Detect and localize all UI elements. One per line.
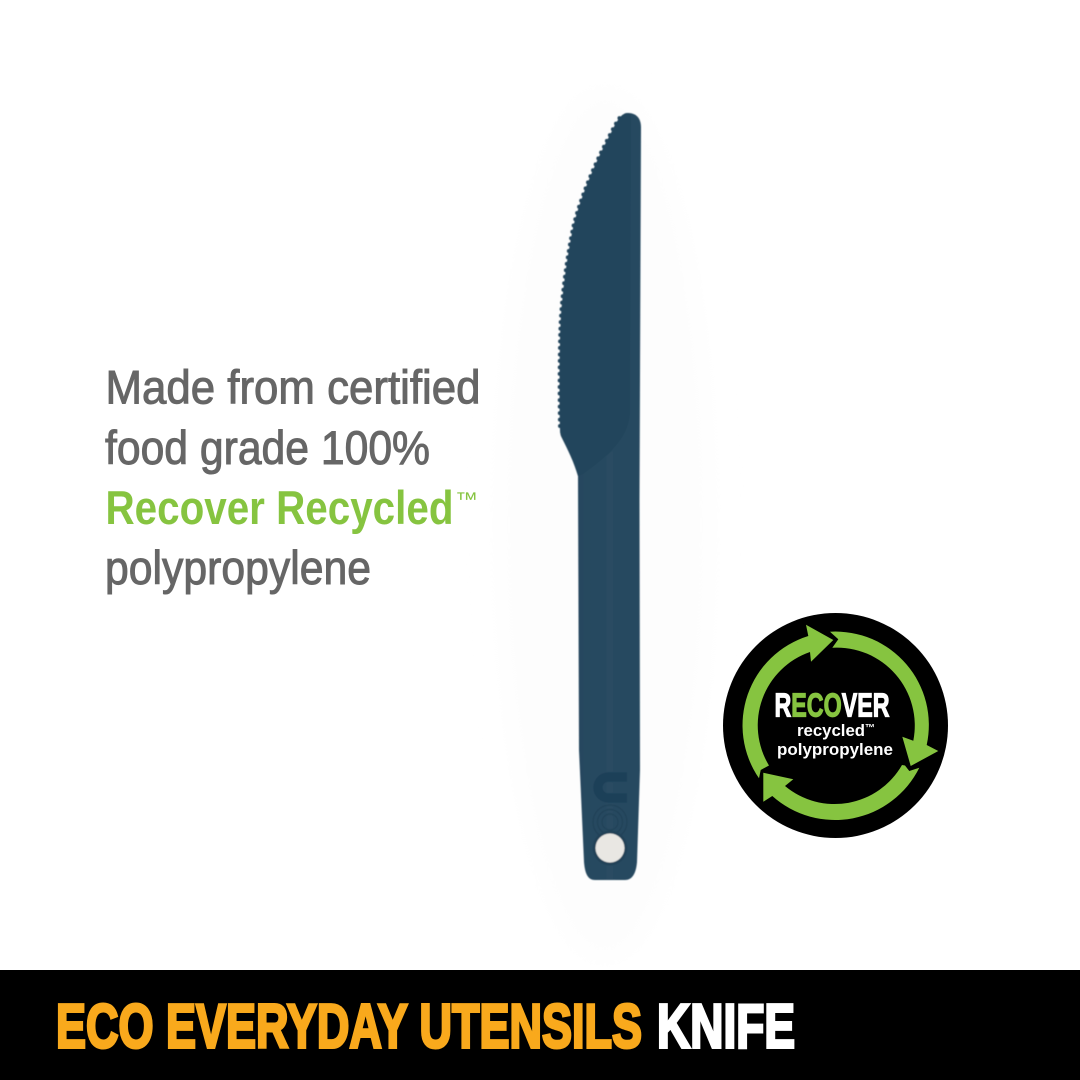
- lanyard hole: [592, 830, 628, 866]
- title: product name: KNIFE: [657, 992, 795, 1062]
- text line: Recover Recycled trademark: Recover Recycled: [106, 481, 454, 534]
- text line: polypropylene: polypropylene: [105, 541, 371, 594]
- bar background: [0, 970, 1080, 1080]
- text line: food grade 100%: food grade 100%: [105, 421, 430, 474]
- soft halo behind knife: [500, 90, 710, 960]
- arrow: left: [743, 625, 833, 778]
- logo mark: concentric circles: [593, 805, 627, 839]
- text line: Recover Recycled trademark: ™: [455, 489, 478, 511]
- title bar: [0, 970, 1080, 1080]
- title: product line: ECO EVERYDAY UTENSILS: [56, 992, 642, 1062]
- blade darker face: [560, 113, 631, 476]
- knife: [560, 113, 641, 880]
- badge trademark: ™: [865, 723, 875, 734]
- text block: product description: [105, 360, 480, 594]
- badge wordmark: RECOVER: RECOVER: [774, 686, 890, 723]
- blade serrations: [560, 116, 621, 426]
- knife body: [560, 113, 641, 880]
- text line: made from certified: Made from certified: [106, 360, 480, 414]
- badge: Recover recycled polypropylene: [723, 613, 948, 838]
- badge disc: [723, 613, 948, 838]
- recycling arrows: [743, 625, 938, 820]
- badge text: polypropylene: polypropylene: [777, 741, 893, 759]
- arrow: right: [830, 632, 938, 766]
- logo mark: U: [598, 777, 627, 798]
- badge text: recycled: recycled: [797, 722, 865, 740]
- arrow: bottom: [763, 765, 919, 820]
